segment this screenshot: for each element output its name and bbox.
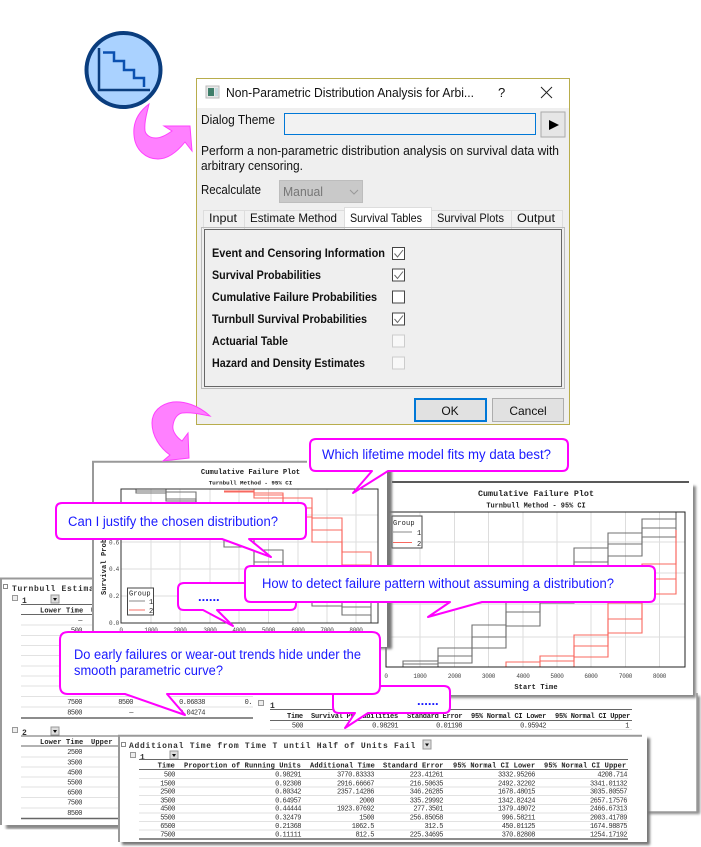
table window: Turnbull estimates: Upper bbox=[91, 739, 113, 747]
table window: additional time until half of units fail: 1678.48015 bbox=[498, 788, 535, 796]
Cancel button bbox=[492, 398, 564, 422]
chart window: survival plot (left): 0.6 bbox=[109, 540, 120, 546]
table window: Turnbull estimates: Lower Time bbox=[40, 608, 83, 616]
chart window: survival plot (left): 0.4 bbox=[109, 566, 120, 573]
table window: additional time until half of units fail: 3332.95266 bbox=[498, 772, 535, 780]
table window: additional time until half of units fail: Proportion of Running Units bbox=[184, 762, 301, 770]
callout: early failures bbox=[60, 632, 380, 715]
chart window: cumulative failure plot (right): 0 bbox=[384, 673, 388, 680]
table window: additional time until half of units fail: 2000 bbox=[359, 798, 374, 806]
table window: additional time until half of units fail: 4208.714 bbox=[597, 772, 627, 780]
description text: arbitrary censoring. bbox=[201, 158, 303, 173]
table window: additional time until half of units fail: 256.85058 bbox=[410, 814, 443, 822]
option: cumulative failure: Cumulative Failure Probabilities bbox=[212, 292, 377, 304]
chart window: cumulative failure plot (right): 7000 bbox=[619, 673, 633, 680]
table window: Turnbull estimates: 1 bbox=[22, 597, 27, 606]
table window: additional time until half of units fail: 0.64957 bbox=[275, 798, 301, 806]
table window: survival probabilities (back): 0.01198 bbox=[436, 722, 462, 730]
table window: additional time until half of units fail: 0.11111 bbox=[275, 832, 301, 840]
option: survival probabilities: Survival Probabilities bbox=[212, 270, 321, 282]
table window: survival probabilities (back): 0.95942 bbox=[520, 722, 546, 730]
recalculate label: Recalculate bbox=[201, 182, 261, 197]
chart window: survival plot (left): 7000 bbox=[320, 627, 334, 634]
table window: survival probabilities (back): Survival Probabilities bbox=[311, 713, 398, 721]
option: turnbull: Turnbull Survival Probabilities bbox=[212, 314, 367, 326]
dialog window bbox=[196, 78, 570, 424]
table window: Turnbull estimates bbox=[0, 578, 253, 829]
table window: additional time until half of units fail: 1500 bbox=[160, 780, 175, 788]
table window: additional time until half of units fail: 312.5 bbox=[424, 823, 443, 831]
table window: survival probabilities (back): 500 bbox=[292, 722, 303, 730]
table window: additional time until half of units fail: 277.3501 bbox=[413, 806, 443, 814]
table window: Turnbull estimates: 4500 bbox=[67, 770, 82, 778]
table window: additional time until half of units fail: 1062.5 bbox=[352, 823, 374, 831]
table window: Turnbull estimates: 8500 bbox=[67, 710, 82, 718]
theme menu button bbox=[541, 112, 565, 137]
callout: detect failure pattern: How to detect failure pattern without assuming a distribution? bbox=[262, 576, 614, 591]
table window: additional time until half of units fail: 450.01125 bbox=[502, 823, 535, 831]
table window: Turnbull estimates: — bbox=[128, 710, 134, 718]
table window: additional time until half of units fail: 95% Normal CI Upper bbox=[544, 762, 626, 770]
table window: additional time until half of units fail: Standard Error bbox=[383, 762, 444, 770]
table window: Turnbull estimates: 8500 bbox=[67, 810, 82, 818]
dialog theme input bbox=[284, 114, 536, 134]
dialog theme label: Dialog Theme bbox=[201, 112, 275, 127]
table window: additional time until half of units fail: 3341.01132 bbox=[590, 780, 627, 788]
tabs: Output bbox=[517, 211, 556, 225]
table window: additional time until half of units fail: 812.5 bbox=[355, 832, 374, 840]
options panel bbox=[202, 228, 564, 388]
chart window: survival plot (left): Cumulative Failure Plot bbox=[201, 469, 300, 477]
table window: Turnbull estimates: Upper Time bbox=[91, 608, 134, 616]
table window: survival probabilities (back): 1 bbox=[625, 722, 629, 730]
chart window: cumulative failure plot (right): 5000 bbox=[550, 673, 564, 680]
table window: Turnbull estimates: 3500 bbox=[67, 760, 82, 768]
callout: ellipsis near chart: ...... bbox=[198, 589, 220, 604]
chart window: survival plot (left): Survival Probability bbox=[101, 508, 109, 595]
table window: additional time until half of units fail bbox=[118, 735, 650, 845]
chart window: cumulative failure plot (right): Cumulative Failure Plot bbox=[478, 489, 594, 499]
table window: additional time until half of units fail: 370.82808 bbox=[502, 832, 535, 840]
option: actuarial table bbox=[212, 335, 404, 348]
chart window: survival plot (left): 6000 bbox=[291, 627, 305, 634]
chart window: cumulative failure plot (right): 4000 bbox=[516, 673, 530, 680]
icon: dialog title icon bbox=[206, 86, 219, 98]
OK button bbox=[415, 399, 486, 421]
OK button: OK bbox=[441, 404, 459, 418]
table window: survival probabilities (back): 1 bbox=[270, 702, 275, 711]
chart window: survival plot (left): 1000 bbox=[144, 627, 158, 634]
chart window: survival plot (left): 1 bbox=[149, 599, 153, 607]
table window: additional time until half of units fail: 2500 bbox=[160, 788, 175, 796]
chart window: cumulative failure plot (right): 2 bbox=[417, 541, 421, 549]
table window: additional time until half of units fail: 223.41261 bbox=[410, 772, 443, 780]
callout: justify distribution: Can I justify the chosen distribution? bbox=[68, 514, 278, 529]
table window: additional time until half of units fail: 225.34695 bbox=[410, 832, 443, 840]
table window: additional time until half of units fail: 1 bbox=[140, 754, 145, 762]
table window: Turnbull estimates: — bbox=[77, 617, 83, 625]
table window: additional time until half of units fail: 4500 bbox=[160, 806, 175, 814]
table window: additional time until half of units fail: Additional Time from Time T until Half of Units Fail bbox=[129, 742, 416, 751]
recalculate combobox: Manual bbox=[283, 184, 323, 199]
chart window: survival plot (left): 2 bbox=[149, 608, 153, 616]
chart window: survival plot (left): 5000 bbox=[262, 627, 276, 634]
table window: Turnbull estimates: 0.06838 bbox=[179, 699, 205, 707]
chart window: cumulative failure plot (right): 1000 bbox=[413, 673, 427, 680]
table window: Turnbull estimates: 2 bbox=[22, 729, 27, 738]
callout: detect failure pattern bbox=[245, 566, 655, 617]
chart window: cumulative failure plot (right): 2000 bbox=[448, 673, 462, 680]
chart window: survival plot (left): Turnbull Method - 95% CI bbox=[209, 480, 293, 486]
tabs: Survival Tables bbox=[350, 211, 422, 225]
option: survival probabilities bbox=[212, 269, 404, 282]
table window: additional time until half of units fail: 0.80342 bbox=[275, 788, 301, 796]
description text: Perform a non-parametric distribution analysis on survival data with bbox=[201, 143, 559, 158]
chart window: survival plot (left): 0.2 bbox=[109, 593, 120, 600]
table window: additional time until half of units fail: Time bbox=[158, 762, 175, 770]
table window: additional time until half of units fail: 0.21368 bbox=[275, 823, 301, 831]
help button: ? bbox=[498, 85, 505, 100]
chart window: survival plot (left): 8000 bbox=[349, 627, 363, 634]
chart window: cumulative failure plot (right): 3000 bbox=[482, 673, 496, 680]
chart window: cumulative failure plot (right): 6000 bbox=[584, 673, 598, 680]
table window: survival probabilities (back): 0.98291 bbox=[372, 722, 398, 730]
callout: justify distribution bbox=[56, 503, 306, 557]
table window: additional time until half of units fail: 1379.48072 bbox=[498, 806, 535, 814]
table window: additional time until half of units fail: 335.29992 bbox=[410, 798, 443, 806]
dialog title: Non-Parametric Distribution Analysis for Arbi... bbox=[226, 85, 474, 100]
tabs bbox=[204, 208, 562, 230]
recalculate combobox bbox=[280, 180, 362, 202]
table window: additional time until half of units fail: 3035.80557 bbox=[590, 788, 627, 796]
table window: survival probabilities (back): Time bbox=[287, 713, 303, 721]
table window: additional time until half of units fail: 2003.41789 bbox=[590, 814, 627, 822]
table window: additional time until half of units fail: 95% Normal CI Lower bbox=[453, 762, 535, 770]
tabs: Survival Plots bbox=[437, 211, 504, 225]
Cancel button: Cancel bbox=[509, 404, 547, 418]
table window: Turnbull estimates: 7500 bbox=[67, 699, 82, 707]
table window: additional time until half of units fail: 500 bbox=[164, 772, 175, 780]
description text bbox=[201, 143, 559, 173]
icon: survival step chart bbox=[86, 33, 160, 107]
table window: additional time until half of units fail: 2492.32202 bbox=[498, 780, 535, 788]
callout: early failures: smooth parametric curve? bbox=[74, 663, 223, 678]
table window: additional time until half of units fail: 0.44444 bbox=[275, 806, 301, 814]
callout: which lifetime model: Which lifetime model fits my data best? bbox=[322, 447, 551, 462]
table window: additional time until half of units fail: 3500 bbox=[160, 798, 175, 806]
table window: Turnbull estimates: 7500 bbox=[67, 800, 82, 808]
option: hazard and density: Hazard and Density Estimates bbox=[212, 358, 365, 370]
tabs: Input bbox=[209, 211, 238, 225]
table window: Turnbull estimates: Turnbull Estimates bbox=[12, 585, 111, 594]
arrow: icon to dialog bbox=[134, 104, 192, 159]
table window: additional time until half of units fail: 0.92308 bbox=[275, 780, 301, 788]
table window: additional time until half of units fail: 2657.17576 bbox=[590, 798, 627, 806]
table window: additional time until half of units fail: 5500 bbox=[160, 814, 175, 822]
chart window: survival plot (left): 2000 bbox=[173, 627, 187, 634]
table window: Turnbull estimates: 6500 bbox=[67, 790, 82, 798]
table window: Turnbull estimates: 5500 bbox=[67, 780, 82, 788]
table window: additional time until half of units fail: 1923.07692 bbox=[337, 806, 374, 814]
table window: additional time until half of units fail: 216.50635 bbox=[410, 780, 443, 788]
callout: early failures: Do early failures or wear-out trends hide under the bbox=[74, 647, 361, 662]
callout: ellipsis near tables bbox=[333, 686, 450, 728]
close button bbox=[541, 87, 552, 98]
table window: additional time until half of units fail: 1500 bbox=[359, 814, 374, 822]
callout: which lifetime model bbox=[310, 439, 568, 493]
table window: additional time until half of units fail: 7500 bbox=[160, 832, 175, 840]
table window: additional time until half of units fail: 996.58211 bbox=[502, 814, 535, 822]
table window: Turnbull estimates: 0. bbox=[245, 699, 252, 707]
chart window: cumulative failure plot (right): 8000 bbox=[653, 673, 667, 680]
chart window: cumulative failure plot (right): Start Time bbox=[514, 684, 558, 692]
table window: survival probabilities (back): 95% Normal CI Upper bbox=[555, 713, 630, 721]
chart window: survival plot (left): 0.0 bbox=[109, 620, 120, 627]
chart window: survival plot (left): 4000 bbox=[232, 627, 246, 634]
table window: additional time until half of units fail: 2466.67313 bbox=[590, 806, 627, 814]
callout: ellipsis near chart bbox=[178, 583, 296, 626]
option: actuarial table: Actuarial Table bbox=[212, 336, 288, 348]
tabs: Estimate Method bbox=[250, 211, 337, 225]
option: event and censoring: Event and Censoring Information bbox=[212, 248, 385, 260]
callout: ellipsis near tables: ...... bbox=[417, 693, 439, 708]
chart window: cumulative failure plot (right): Turnbull Method - 95% CI bbox=[486, 502, 586, 510]
table window: additional time until half of units fail: 2357.14286 bbox=[337, 788, 374, 796]
table window: additional time until half of units fail: 2916.66667 bbox=[337, 780, 374, 788]
table window: Turnbull estimates: 500 bbox=[71, 628, 82, 636]
table window: additional time until half of units fail: 1342.82424 bbox=[498, 798, 535, 806]
table window: Turnbull estimates: 0.04274 bbox=[179, 710, 205, 718]
table window: additional time until half of units fail: 0.98291 bbox=[275, 772, 301, 780]
table window: additional time until half of units fail: 0.32479 bbox=[275, 814, 301, 822]
chart window: survival plot (left): 3000 bbox=[203, 627, 217, 634]
chart window: cumulative failure plot (right): Group bbox=[393, 520, 415, 528]
arrow: dialog to results bbox=[152, 402, 210, 461]
table window: additional time until half of units fail: 346.26285 bbox=[410, 788, 443, 796]
table window: Turnbull estimates: 8500 bbox=[118, 699, 133, 707]
table window: survival probabilities (back) bbox=[253, 693, 700, 814]
chart window: cumulative failure plot (right) bbox=[384, 482, 696, 698]
table window: survival probabilities (back): Standard Error bbox=[407, 713, 462, 721]
chart window: survival plot (left) bbox=[92, 461, 392, 649]
chart window: cumulative failure plot (right): 1 bbox=[417, 530, 421, 538]
chart window: survival plot (left): Group bbox=[129, 590, 151, 598]
table window: survival probabilities (back): 95% Normal CI Lower bbox=[471, 713, 546, 721]
table window: Turnbull estimates: 2500 bbox=[67, 749, 82, 757]
table window: additional time until half of units fail: 6500 bbox=[160, 823, 175, 831]
table window: additional time until half of units fail: 1254.17192 bbox=[590, 832, 627, 840]
table window: Turnbull estimates: Lower Time bbox=[40, 739, 83, 747]
table window: additional time until half of units fail: Additional Time bbox=[310, 762, 375, 770]
table window: additional time until half of units fail: 3770.83333 bbox=[337, 772, 374, 780]
chart window: survival plot (left): 0 bbox=[119, 627, 123, 634]
table window: additional time until half of units fail: 1674.98875 bbox=[590, 823, 627, 831]
